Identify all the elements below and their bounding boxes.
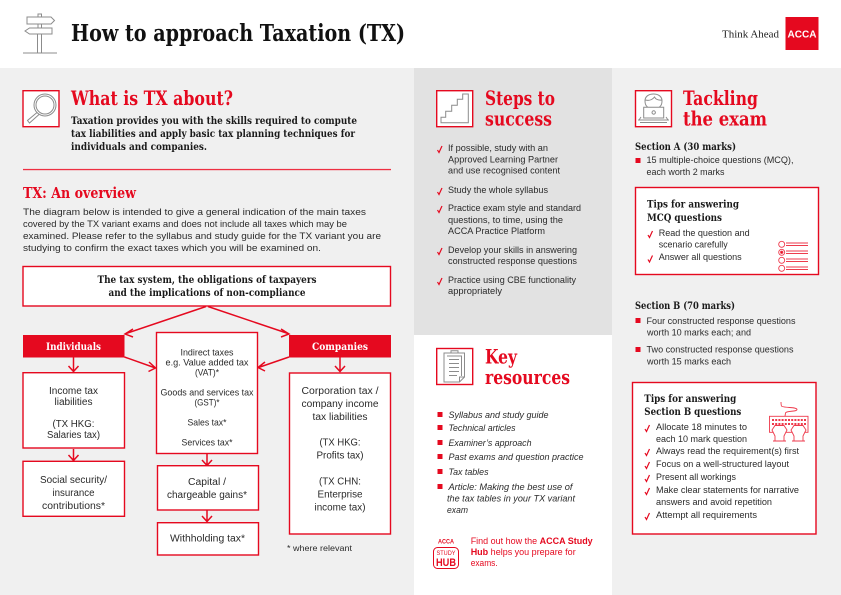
checklist: Practice using CBE functionality (448, 275, 576, 286)
flow diagram (23, 266, 391, 555)
section B: worth 10 marks each; and (646, 328, 751, 339)
icon: person at laptop (636, 91, 672, 127)
icon: stairs (437, 91, 473, 127)
section B: Four constructed response questions (646, 316, 796, 327)
box: income tax (23, 373, 124, 448)
box: indirect taxes: (VAT)* (195, 368, 219, 378)
checklist: Practice exam style and standard (448, 203, 581, 214)
icon: ACCA study hub: HUB (436, 557, 456, 569)
checklist: Approved Learning Partner (448, 154, 559, 165)
callout: section B tips: each 10 mark question (656, 434, 747, 445)
callout: MCQ tips: scenario carefully (659, 239, 728, 250)
box: indirect taxes: (GST)* (194, 398, 220, 408)
icon: ACCA study hub: ACCA (438, 540, 455, 546)
box: indirect taxes: Goods and services tax (160, 388, 254, 398)
section A: each worth 2 marks (646, 167, 725, 178)
intro text: individuals and companies. (71, 141, 207, 153)
icon: keyboard and hands (770, 402, 808, 441)
icon: multiple choice options (779, 241, 808, 271)
box: corporation tax (290, 373, 390, 534)
callout: section B tips (632, 382, 816, 534)
box: companies (289, 335, 391, 358)
box: indirect taxes: Services tax* (182, 438, 233, 448)
overview text: examined. Please refer to the syllabus and study guide for the TX variant you are (23, 231, 381, 242)
heading: the exam (683, 108, 767, 131)
section B: worth 15 marks each (646, 357, 731, 368)
box: income tax: Salaries tax) (47, 430, 100, 441)
checklist: constructed response questions (448, 256, 577, 267)
box: corporation tax: (TX CHN: (319, 477, 361, 488)
checklist: and use recognised content (448, 166, 560, 177)
callout: section B tips: answers and avoid repetition (656, 497, 772, 508)
callout: section B tips: Always read the requirement(s) first (656, 446, 799, 457)
callout: section B tips: Attempt all requirements (656, 510, 757, 521)
section B (635, 300, 796, 368)
icon: ACCA study hub (434, 540, 458, 569)
resource list: Tax tables (448, 467, 489, 478)
box: capital gains (158, 466, 258, 510)
box: corporation tax: tax liabilities (312, 412, 368, 423)
heading: Key (485, 346, 518, 368)
box: tax system (23, 266, 390, 306)
box: income tax: (TX HKG: (52, 419, 94, 430)
box: tax system: The tax system, the obligations of taxpayers (98, 274, 317, 286)
logo: ACCA (786, 17, 818, 50)
callout: MCQ tips: Read the question and (659, 228, 750, 239)
box: corporation tax: Profits tax) (316, 451, 364, 462)
box: capital gains: chargeable gains* (167, 490, 247, 501)
overview text (23, 207, 381, 254)
callout: section B tips: Section B questions (644, 406, 742, 418)
resource list: Examiner’s approach (448, 438, 532, 449)
intro text: Taxation provides you with the skills required to compute (71, 115, 357, 127)
study hub link text: Find out how the ACCA Study (471, 536, 593, 547)
box: withholding tax: Withholding tax* (170, 534, 245, 545)
heading: What is TX about? (70, 87, 233, 110)
box: income tax: liabilities (54, 397, 92, 408)
section B: Two constructed response questions (646, 345, 794, 356)
section A (635, 141, 794, 178)
callout: MCQ tips: Answer all questions (659, 252, 742, 263)
icon: ACCA study hub: STUDY (436, 551, 456, 557)
checklist: ACCA Practice Platform (448, 226, 545, 237)
tagline: Think Ahead (722, 30, 780, 40)
resource list: the tax tables in your TX variant (447, 494, 575, 504)
arrows: individuals and companies to indirect taxes (124, 357, 289, 372)
box: tax system: and the implications of non-compliance (108, 287, 306, 299)
heading (485, 87, 555, 131)
callout: MCQ tips: Tips for answering (647, 199, 739, 211)
box: corporation tax: Enterprise (318, 490, 363, 501)
heading: success (485, 108, 552, 131)
box: social security: insurance (52, 488, 95, 499)
icon: clipboard (437, 348, 473, 384)
intro text (71, 115, 357, 153)
panel: tackling the exam (612, 68, 841, 595)
resource list: Past exams and question practice (448, 452, 584, 463)
callout: MCQ tips (636, 188, 818, 274)
arrows: tax system to individuals and companies (125, 306, 289, 337)
checklist (438, 143, 581, 297)
study hub link text: exams. (471, 558, 498, 569)
heading (485, 346, 570, 389)
box: corporation tax: Corporation tax / (302, 386, 379, 397)
box: withholding tax (158, 523, 258, 555)
resource list (438, 410, 584, 516)
logo: ACCA: ACCA (788, 28, 817, 40)
checklist: appropriately (448, 286, 502, 297)
box: corporation tax: (TX HKG: (320, 438, 360, 449)
study hub link text (471, 536, 593, 569)
panel: steps to success (414, 68, 612, 335)
box: indirect taxes: Indirect taxes (180, 348, 234, 358)
checklist: questions, to time, using the (448, 215, 563, 226)
box: individuals: Individuals (46, 341, 101, 353)
section A: Section A (30 marks) (635, 141, 736, 153)
heading (683, 87, 767, 131)
box: indirect taxes: e.g. Value added tax (166, 358, 249, 368)
subheading: TX: An overview (23, 184, 137, 202)
box: social security (23, 461, 124, 516)
icon: magnifying glass (23, 91, 59, 127)
resource list: exam (447, 505, 468, 516)
icon: signpost (23, 14, 57, 53)
box: social security: contributions* (42, 501, 105, 512)
footnote: * where relevant (287, 543, 353, 553)
overview text: studying to confirm the exact taxes which you will be examined on. (23, 243, 321, 254)
checklist: Develop your skills in answering (448, 245, 577, 256)
overview text: The diagram below is intended to give a general indication of the main taxes (23, 207, 366, 218)
box: corporation tax: company income (302, 399, 379, 410)
title: How to approach Taxation (TX) (71, 20, 405, 47)
study hub link text: Hub helps you prepare for (471, 547, 576, 558)
box: indirect taxes (156, 332, 258, 454)
box: income tax: Income tax (49, 386, 98, 397)
callout: section B tips: Present all workings (656, 472, 736, 483)
callout: section B tips: Make clear statements for narrative (656, 485, 799, 496)
box: corporation tax: income tax) (314, 503, 366, 514)
intro text: tax liabilities and apply basic tax planning techniques for (71, 128, 356, 140)
callout: section B tips: Allocate 18 minutes to (656, 422, 747, 433)
resource list: Article: Making the best use of (448, 482, 574, 493)
section B: Section B (70 marks) (635, 300, 735, 312)
callout: MCQ tips: MCQ questions (647, 212, 722, 224)
box: capital gains: Capital / (188, 477, 226, 488)
arrows: vertical flow (68, 358, 345, 522)
callout: section B tips: Focus on a well-structured layout (656, 459, 789, 470)
checklist: If possible, study with an (448, 143, 548, 154)
panel: key resources (414, 335, 612, 595)
checklist: Study the whole syllabus (448, 185, 548, 196)
resource list: Syllabus and study guide (448, 410, 548, 421)
box: individuals (23, 335, 124, 358)
callout: section B tips: Tips for answering (644, 393, 736, 405)
resource list: Technical articles (448, 423, 516, 434)
section A: 15 multiple-choice questions (MCQ), (646, 155, 794, 166)
box: social security: Social security/ (40, 475, 107, 486)
header (23, 14, 818, 53)
box: companies: Companies (312, 341, 368, 353)
heading: resources (485, 366, 570, 389)
panel: what is TX about (0, 68, 414, 595)
overview text: covered by the TX variant exams and does not include all taxes which may be (23, 219, 347, 230)
heading: Steps to (485, 87, 555, 110)
heading: Tackling (683, 87, 758, 110)
box: indirect taxes: Sales tax* (188, 418, 227, 428)
